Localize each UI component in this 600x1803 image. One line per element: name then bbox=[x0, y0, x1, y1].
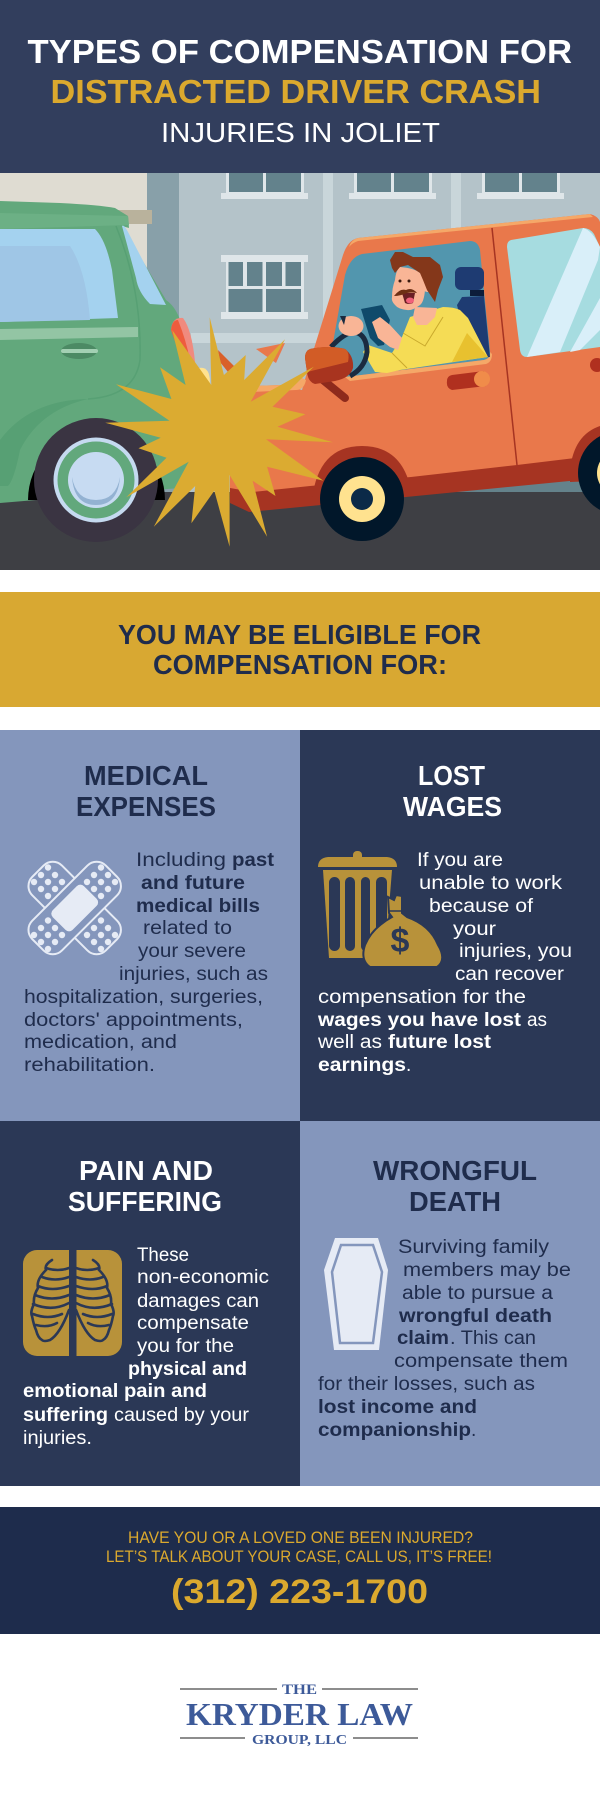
heading: medical expenses: EXPENSES bbox=[76, 791, 216, 822]
text: lost wages body: If you are bbox=[417, 850, 503, 871]
heading: pain and suffering bbox=[68, 1155, 222, 1217]
text: pain and suffering body: emotional pain and bbox=[23, 1381, 207, 1402]
text: lost wages body: well as bbox=[317, 1032, 382, 1053]
text: medical expenses body: rehabilitation. bbox=[24, 1055, 155, 1076]
text: pain and suffering body: physical and bbox=[128, 1359, 247, 1380]
text: medical expenses body: medication, and bbox=[24, 1032, 177, 1053]
text: lost wages body: future lost bbox=[388, 1032, 492, 1053]
text: medical expenses body: doctors' appointments, bbox=[24, 1010, 243, 1031]
text: lost wages body: compensation for the bbox=[318, 987, 526, 1008]
orange car bbox=[199, 214, 600, 512]
text: lost wages body: can recover bbox=[455, 964, 565, 985]
text: wrongful death body: able to pursue a bbox=[402, 1283, 553, 1304]
text: pain and suffering body: you for the bbox=[137, 1336, 234, 1357]
text: wrongful death body: claim bbox=[397, 1328, 449, 1349]
driver window bbox=[330, 241, 490, 377]
heading: pain and suffering: SUFFERING bbox=[68, 1186, 222, 1217]
road bbox=[0, 492, 600, 570]
panel: medical expenses bbox=[0, 730, 300, 1121]
text: medical expenses body: hospitalization, surgeries, bbox=[24, 987, 263, 1008]
text: wrongful death body: . This can bbox=[450, 1328, 536, 1349]
text: wrongful death body: companionship bbox=[318, 1420, 471, 1441]
logo: The Kryder Law Group bbox=[180, 1682, 418, 1748]
heading: lost wages: LOST bbox=[418, 760, 485, 791]
icon: trash can and money bag: $ bbox=[391, 922, 410, 960]
text: wrongful death body: . bbox=[471, 1420, 476, 1441]
text: pain and suffering body: non-economic bbox=[137, 1267, 269, 1288]
text: pain and suffering body: injuries. bbox=[23, 1428, 92, 1449]
text: lost wages body: unable to work bbox=[419, 873, 563, 894]
text: lost wages body: . bbox=[406, 1055, 411, 1076]
band: eligible heading: COMPENSATION FOR: bbox=[153, 649, 447, 680]
text: wrongful death body: wrongful death bbox=[398, 1306, 552, 1327]
text: pain and suffering body: caused by your bbox=[114, 1405, 250, 1426]
text: lost wages body bbox=[317, 850, 572, 1076]
text: lost wages body: as bbox=[527, 1010, 547, 1031]
title bbox=[28, 33, 572, 148]
heading: wrongful death: DEATH bbox=[409, 1186, 501, 1217]
text: lost wages body: earnings bbox=[318, 1055, 406, 1076]
panel: lost wages bbox=[300, 730, 600, 1121]
text: pain and suffering body: compensate bbox=[137, 1313, 249, 1334]
text: pain and suffering body: These bbox=[137, 1245, 189, 1266]
text: pain and suffering body bbox=[23, 1245, 269, 1449]
illustration: distracted driver crash bbox=[0, 173, 600, 570]
phone number: (312) 223-1700 bbox=[171, 1573, 428, 1611]
green car bbox=[0, 201, 198, 542]
text: medical expenses body: related to bbox=[143, 918, 232, 939]
text: medical expenses body: past bbox=[232, 850, 275, 871]
text: medical expenses body: Including bbox=[136, 850, 226, 871]
side mirror bbox=[305, 347, 353, 398]
door handle bbox=[447, 371, 486, 390]
title: DISTRACTED DRIVER CRASH bbox=[50, 73, 541, 110]
explosion starburst bbox=[105, 317, 333, 547]
text: lost wages body: wages you have lost bbox=[317, 1010, 522, 1031]
icon: trash can and money bag bbox=[318, 851, 442, 967]
call to action panel bbox=[0, 1507, 600, 1634]
logo: The Kryder Law Group: THE bbox=[282, 1682, 317, 1698]
rear window bbox=[507, 228, 600, 357]
text: wrongful death body: for their losses, such as bbox=[318, 1374, 535, 1395]
text: pain and suffering body: suffering bbox=[23, 1405, 108, 1426]
text: lost wages body: injuries, you bbox=[459, 941, 572, 962]
text: medical expenses body: your severe bbox=[138, 941, 246, 962]
text: wrongful death body: Surviving family bbox=[398, 1237, 550, 1258]
call to action panel: LET’S TALK ABOUT YOUR CASE, CALL US, IT’S FREE! bbox=[106, 1547, 492, 1566]
logo: The Kryder Law Group: GROUP, LLC bbox=[252, 1733, 347, 1748]
band: eligible heading: YOU MAY BE ELIGIBLE FOR bbox=[118, 619, 481, 650]
heading: medical expenses bbox=[76, 760, 216, 822]
title: TYPES OF COMPENSATION FOR bbox=[28, 33, 572, 70]
icon: crossed bandages bbox=[23, 856, 126, 960]
text: wrongful death body: members may be bbox=[403, 1260, 571, 1281]
text: pain and suffering body: damages can bbox=[137, 1291, 259, 1312]
logo: The Kryder Law Group: KRYDER LAW bbox=[186, 1696, 413, 1732]
header panel bbox=[0, 0, 600, 173]
text: wrongful death body: compensate them bbox=[394, 1351, 568, 1372]
building windows bbox=[221, 173, 564, 319]
panel: wrongful death bbox=[300, 1121, 600, 1486]
text: medical expenses body: medical bills bbox=[136, 896, 260, 917]
text: wrongful death body bbox=[318, 1237, 571, 1441]
heading: wrongful death bbox=[373, 1155, 537, 1217]
text: medical expenses body: injuries, such as bbox=[119, 964, 268, 985]
title: INJURIES IN JOLIET bbox=[161, 117, 440, 148]
panel: pain and suffering bbox=[0, 1121, 300, 1486]
call to action panel: HAVE YOU OR A LOVED ONE BEEN INJURED? bbox=[128, 1528, 473, 1547]
text: lost wages body: because of bbox=[429, 896, 534, 917]
heading: lost wages: WAGES bbox=[403, 791, 502, 822]
seat bbox=[455, 267, 484, 290]
icon: coffin bbox=[324, 1238, 388, 1350]
text: medical expenses body: and future bbox=[141, 873, 245, 894]
heading: wrongful death: WRONGFUL bbox=[373, 1155, 537, 1186]
orange front wheel bbox=[320, 431, 600, 541]
heading: pain and suffering: PAIN AND bbox=[79, 1155, 213, 1186]
building background bbox=[0, 173, 600, 493]
text: lost wages body: your bbox=[453, 919, 497, 940]
heading: medical expenses: MEDICAL bbox=[84, 760, 208, 791]
text: medical expenses body bbox=[24, 850, 275, 1076]
text: wrongful death body: lost income and bbox=[318, 1397, 477, 1418]
band: eligible heading bbox=[0, 592, 600, 707]
heading: lost wages bbox=[403, 760, 502, 822]
icon: rib cage bbox=[23, 1250, 122, 1356]
driver with phone bbox=[331, 252, 488, 376]
